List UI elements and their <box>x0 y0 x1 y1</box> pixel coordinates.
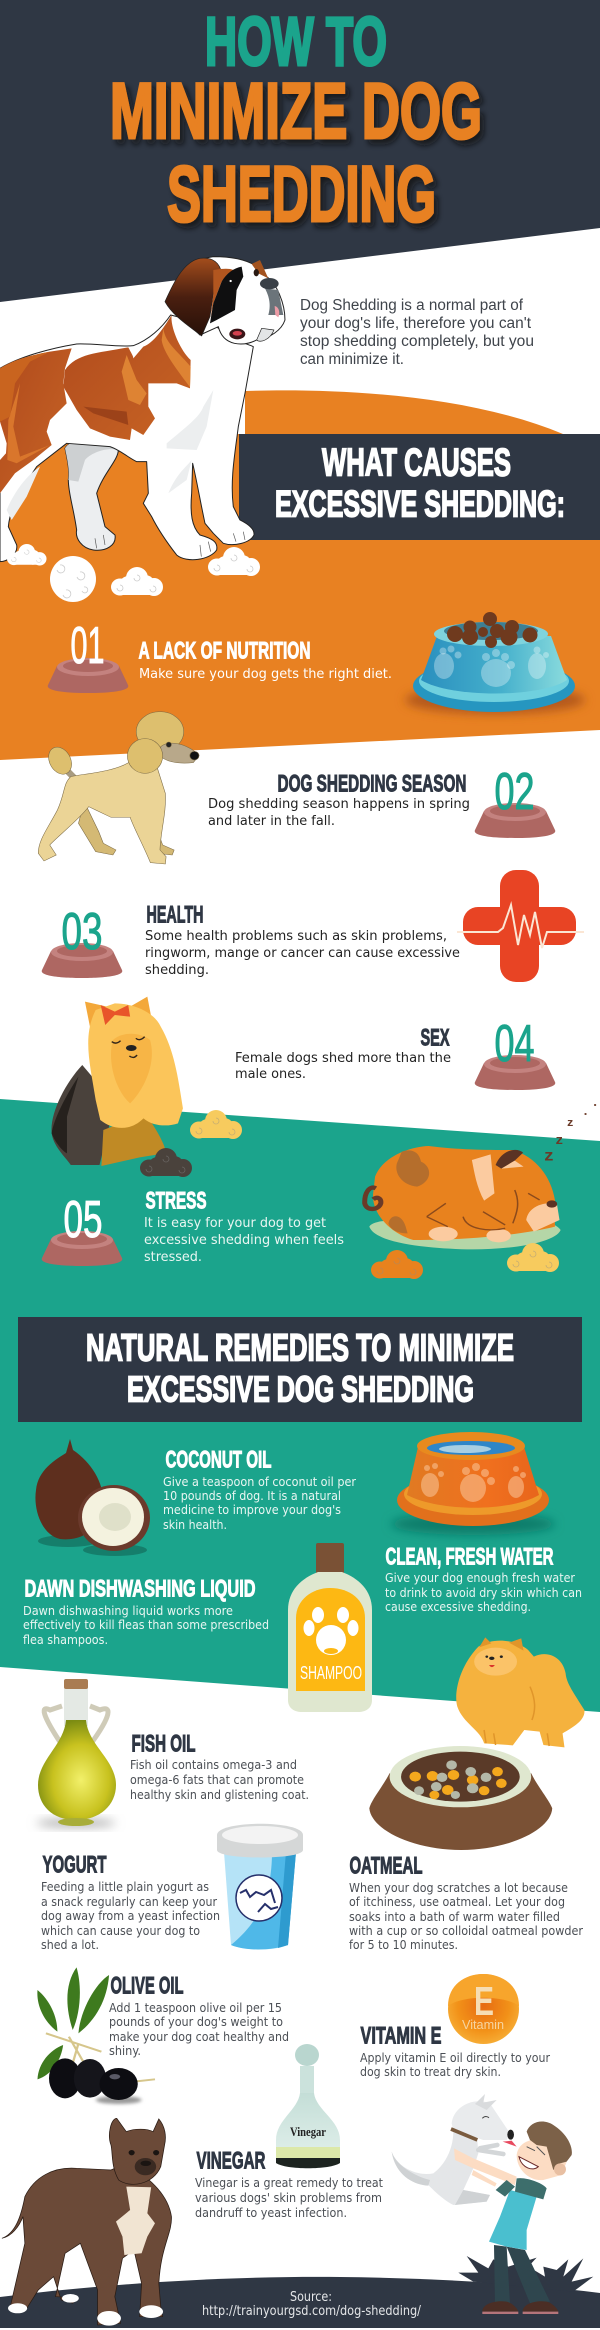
remedy: oatmeal <box>349 1852 583 1952</box>
heading: vinegar: VINEGAR <box>196 2148 266 2174</box>
intro text: can minimize it. <box>300 351 404 368</box>
intro text: stop shedding completely, but you <box>300 333 534 350</box>
illustration: blue food bowl <box>405 612 585 714</box>
description: season <box>208 796 470 829</box>
description: vinegar: various dogs' skin problems from <box>195 2191 382 2205</box>
illustration: vinegar bottle: Vinegar <box>290 2124 326 2139</box>
remedy: yogurt <box>41 1852 220 1952</box>
description: season: Dog shedding season happens in spring <box>208 796 470 812</box>
fur clumps beside yorkshire terrier <box>140 1110 242 1177</box>
description: dawn: flea shampoos. <box>23 1633 108 1647</box>
fur clumps beside bulldog <box>371 1243 559 1279</box>
description: oatmeal <box>349 1881 583 1952</box>
illustration: shampoo bottle: SHAMPOO <box>300 1663 362 1683</box>
description: yogurt: which can cause your dog to <box>41 1924 200 1938</box>
heading: coconut oil: COCONUT OIL <box>166 1446 272 1474</box>
description: fish oil: omega-6 fats that can promote <box>130 1773 304 1787</box>
cause 01: lack of nutrition <box>48 617 392 693</box>
orange band background <box>0 390 600 760</box>
remedy: vitamin E <box>360 2022 550 2079</box>
description: stress: It is easy for your dog to get <box>144 1215 326 1231</box>
heading: a lack of nutrition: A LACK OF NUTRITION <box>138 638 310 664</box>
legs <box>494 2245 550 2303</box>
description: season: and later in the fall. <box>208 813 335 829</box>
description: yogurt: Feeding a little plain yogurt as <box>41 1880 209 1894</box>
illustration: orange water bowl <box>391 1432 555 1535</box>
intro text: your dog's life, therefore you can't <box>300 315 532 332</box>
number bowl 02 <box>475 763 555 838</box>
icon: red medical cross with heartbeat <box>457 870 584 982</box>
description: dawn: effectively to kill fleas than some prescribed <box>23 1618 269 1632</box>
description: clean water: to drink to avoid dry skin which can <box>385 1586 582 1600</box>
shoes <box>482 2301 558 2314</box>
heading: health: HEALTH <box>146 902 204 928</box>
number bowl 03: 03 <box>62 903 102 961</box>
description: fish oil: Fish oil contains omega-3 and <box>130 1758 297 1772</box>
illustration: coconut <box>35 1439 150 1556</box>
illustration: St Bernard dog <box>0 257 285 562</box>
remedy: vinegar <box>195 2148 383 2220</box>
description: sex: Female dogs shed more than the <box>235 1050 451 1066</box>
heading: yogurt: YOGURT <box>42 1852 107 1878</box>
number bowl 05 <box>42 1191 122 1266</box>
description: coconut oil: medicine to improve your dog's <box>163 1503 341 1517</box>
title <box>110 3 482 238</box>
fur clump clouds under St Bernard <box>7 544 260 602</box>
description: oatmeal: of itchiness, use oatmeal. Let your dog <box>349 1895 565 1909</box>
description: oatmeal: soaks into a bath of warm water filled <box>349 1910 560 1924</box>
sleeves <box>496 2178 547 2199</box>
heading panel: what causes excessive shedding <box>239 434 600 540</box>
illustration: brown pit bull <box>2 2118 171 2326</box>
shirt <box>489 2190 537 2250</box>
illustration: yorkshire terrier <box>52 997 183 1166</box>
description: stress <box>144 1215 344 1265</box>
description: coconut oil <box>163 1475 356 1532</box>
description: health <box>145 928 460 978</box>
description: stress: excessive shedding when feels <box>144 1232 344 1248</box>
description: sex: male ones. <box>235 1066 306 1082</box>
illustration: yogurt cup <box>217 1824 303 1950</box>
description: coconut oil: skin health. <box>163 1518 227 1532</box>
icon: vitamin E capsule: Vitamin <box>462 2017 504 2032</box>
description: stress: stressed. <box>144 1249 202 1265</box>
number bowl 05: 05 <box>64 1191 102 1249</box>
description: olive oil <box>109 2001 289 2058</box>
source text: http://trainyourgsd.com/dog-shedding/ <box>202 2304 422 2319</box>
description: coconut oil: 10 pounds of dog. It is a natural <box>163 1489 341 1503</box>
description: oatmeal: with a cup or so colloidal oatmeal powder <box>349 1924 583 1938</box>
head <box>517 2122 572 2180</box>
cause 04: sex <box>235 1015 555 1090</box>
description: health: ringworm, mange or cancer can cause excessive <box>145 945 460 961</box>
teal band background <box>0 1099 600 1712</box>
description: clean water: Give your dog enough fresh water <box>385 1571 575 1585</box>
number bowl 04: 04 <box>494 1015 534 1073</box>
description: vitamin e: Apply vitamin E oil directly to your <box>360 2051 550 2065</box>
description: clean water <box>385 1571 582 1614</box>
source text <box>202 2290 422 2319</box>
description: health: shedding. <box>145 962 209 978</box>
icon: vitamin E capsule: E <box>474 1978 494 2024</box>
remedy: coconut oil <box>163 1446 356 1532</box>
illustration: olive oil bottle <box>36 1679 116 1827</box>
illustration: sleeping bulldog with zzz: z <box>567 1118 574 1129</box>
icon: vitamin E capsule <box>448 1974 519 2044</box>
number bowl 01 <box>48 617 128 693</box>
description: clean water: cause excessive shedding. <box>385 1600 531 1614</box>
description: health: Some health problems such as skin problems, <box>145 928 447 944</box>
heading: stress: STRESS <box>146 1188 206 1214</box>
number bowl 03 <box>42 903 122 978</box>
illustration: sleeping bulldog with zzz: z <box>556 1133 563 1147</box>
illustration: sleeping bulldog with zzz <box>365 1104 596 1249</box>
description: vitamin e <box>360 2051 550 2079</box>
description: fish oil: healthy skin and glistening coat. <box>130 1788 309 1802</box>
description: olive oil: pounds of your dog's weight to <box>109 2015 283 2029</box>
description: olive oil: make your dog coat healthy and <box>109 2030 289 2044</box>
description: fish oil <box>130 1758 309 1802</box>
heading panel: natural remedies <box>18 1317 582 1422</box>
description: dawn <box>23 1604 269 1647</box>
heading: dawn dishwashing liquid: DAWN DISHWASHING LIQUID <box>24 1576 256 1602</box>
remedy: dawn dishwashing liquid <box>23 1576 269 1647</box>
heading: oatmeal: OATMEAL <box>350 1852 422 1880</box>
heading: dog shedding season: DOG SHEDDING SEASON <box>278 770 466 798</box>
illustration: poodle <box>38 712 199 864</box>
heading: fish oil: FISH OIL <box>132 1730 196 1758</box>
illustration: shampoo bottle <box>288 1543 372 1712</box>
white dog <box>392 2094 517 2205</box>
heading: vitamin e: VITAMIN E <box>360 2022 442 2050</box>
description: nutrition: Make sure your dog gets the right diet. <box>139 666 392 682</box>
title: HOW TO <box>205 3 387 80</box>
source text: Source: <box>290 2290 332 2305</box>
illustration: pomeranian <box>456 1637 584 1747</box>
description: yogurt <box>41 1880 220 1952</box>
cause 02: dog shedding season <box>208 763 555 838</box>
dark header background <box>0 0 600 302</box>
illustration: man hugging white dog <box>392 2094 593 2314</box>
number bowl 02: 02 <box>494 763 534 821</box>
illustration: kibble bowl <box>369 1746 552 1850</box>
cause 05: stress <box>42 1188 344 1266</box>
number bowl 04 <box>475 1015 555 1090</box>
title: SHEDDING <box>167 149 436 238</box>
description: vinegar <box>195 2176 383 2220</box>
remedy: fish oil <box>130 1730 309 1802</box>
description: coconut oil: Give a teaspoon of coconut oil per <box>163 1475 356 1489</box>
description: yogurt: shed a lot. <box>41 1938 99 1952</box>
description: vinegar: Vinegar is a great remedy to treat <box>195 2176 383 2190</box>
description: vinegar: dandruff to yeast infection. <box>195 2206 347 2220</box>
remedy: clean, fresh water <box>385 1544 582 1614</box>
description: yogurt: a snack regularly can keep your <box>41 1895 217 1909</box>
description: olive oil: shiny. <box>109 2044 141 2058</box>
description: sex <box>235 1050 451 1082</box>
description: olive oil: Add 1 teaspoon olive oil per 15 <box>109 2001 282 2015</box>
number bowl 01: 01 <box>70 617 104 675</box>
intro text <box>300 297 534 368</box>
heading: sex: SEX <box>420 1024 450 1052</box>
intro text: Dog Shedding is a normal part of <box>300 297 524 314</box>
remedy: olive oil <box>109 1972 289 2058</box>
description: dawn: Dawn dishwashing liquid works more <box>23 1604 233 1618</box>
description: oatmeal: When your dog scratches a lot because <box>349 1881 568 1895</box>
cause 03: health <box>42 902 460 978</box>
dark footer hill <box>0 2277 600 2328</box>
grass <box>458 2256 593 2292</box>
heading: olive oil: OLIVE OIL <box>110 1972 184 2000</box>
arms <box>454 2148 517 2187</box>
illustration: olive branch <box>37 1967 155 2104</box>
description: yogurt: dog away from a yeast infection <box>41 1909 220 1923</box>
illustration: vinegar bottle <box>276 2044 340 2168</box>
description: vitamin e: dog skin to treat dry skin. <box>360 2065 501 2079</box>
description: oatmeal: for 5 to 10 minutes. <box>349 1938 458 1952</box>
illustration: sleeping bulldog with zzz: z <box>544 1146 553 1164</box>
